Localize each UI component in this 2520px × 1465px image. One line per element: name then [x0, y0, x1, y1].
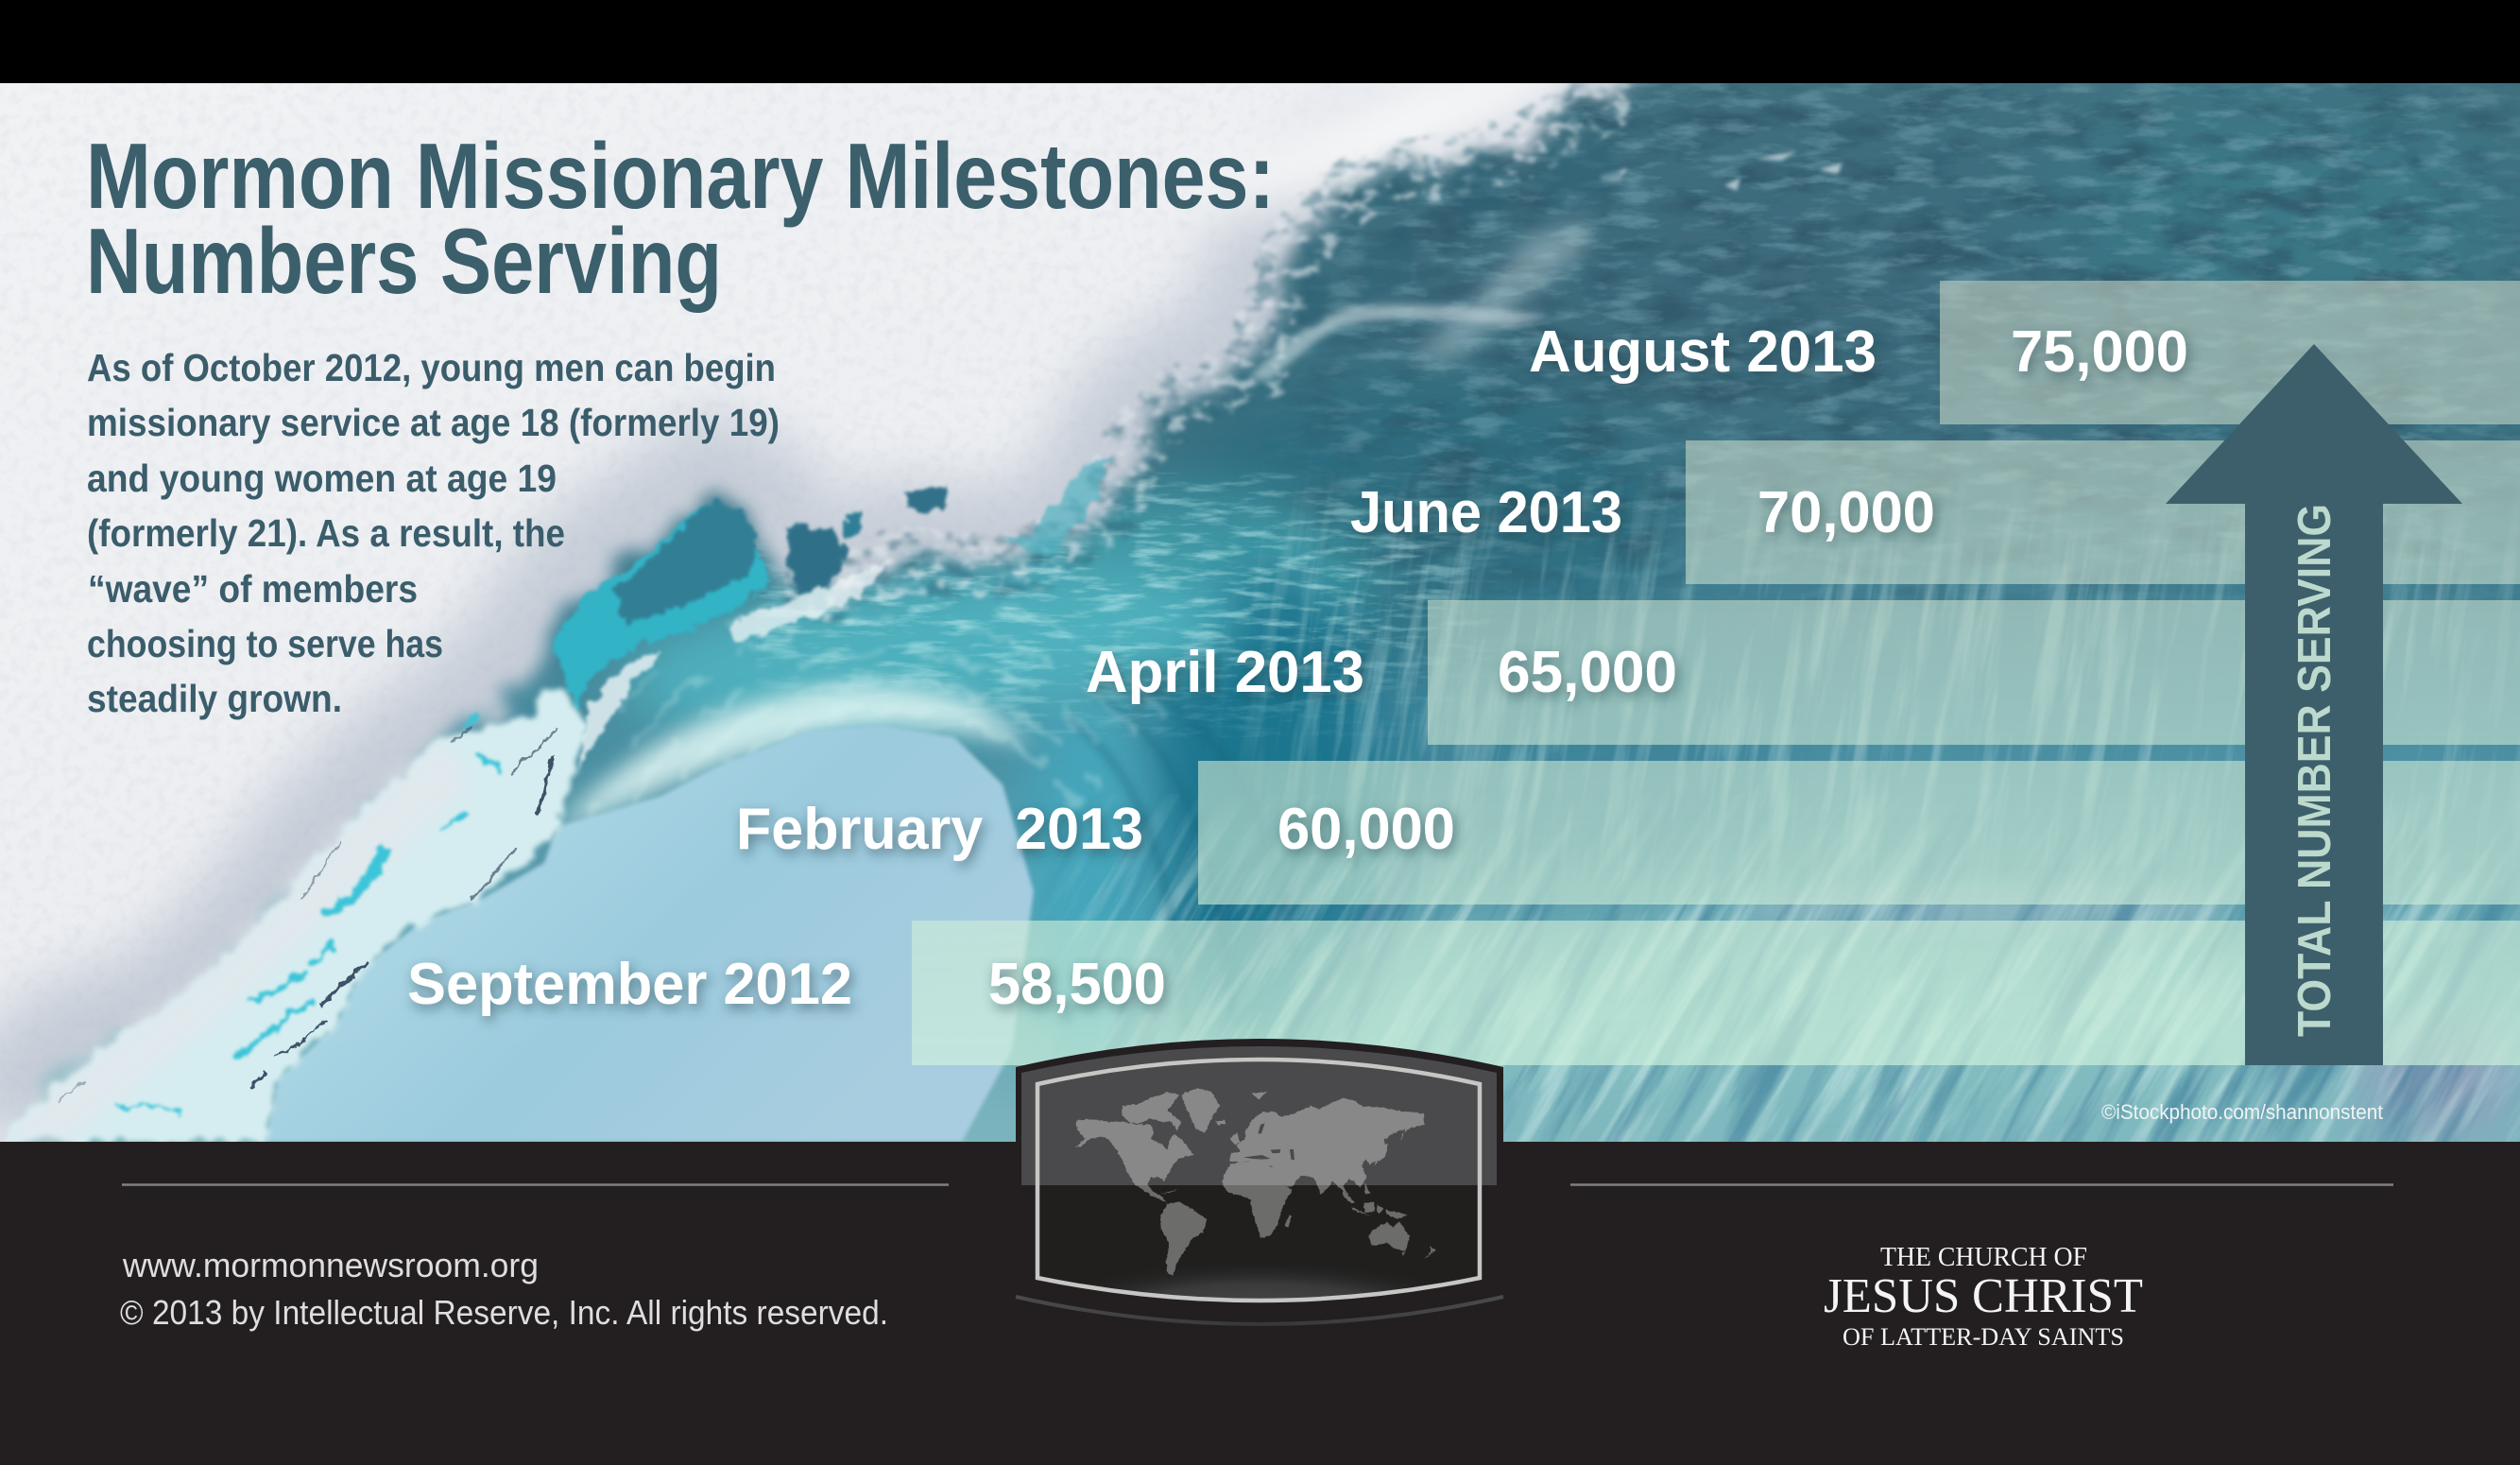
crest highlight	[1249, 304, 1550, 380]
footer band	[0, 1142, 2520, 1465]
photo credit: ©iStockphoto.com/shannonstent	[2101, 1100, 2383, 1124]
intro paragraph: missionary service at age 18 (formerly 19)	[87, 401, 780, 444]
intro paragraph	[87, 346, 780, 720]
bar: June 2013	[1686, 440, 2520, 584]
churned foam band	[0, 686, 586, 1142]
intro paragraph: and young women at age 19	[87, 457, 557, 500]
intro paragraph: steadily grown.	[87, 677, 342, 720]
label: April 2013: April 2013	[1086, 640, 1364, 705]
arrow label: TOTAL NUMBER SERVING	[2289, 504, 2340, 1037]
top black band	[0, 0, 2520, 83]
curl pool	[552, 458, 1110, 709]
lower arc	[1016, 1297, 1503, 1324]
intro paragraph: (formerly 21). As a result, the	[87, 511, 565, 555]
label: June 2013: June 2013	[1350, 480, 1622, 545]
value: 65,000: 65,000	[1498, 640, 1677, 705]
website and copyright: www.mormonnewsroom.org	[122, 1246, 539, 1284]
background photo: ocean wave	[0, 83, 2520, 1142]
title: Numbers Serving	[86, 209, 722, 313]
value: 60,000: 60,000	[1277, 797, 1455, 862]
intro paragraph: “wave” of members	[88, 567, 418, 611]
arrow: total number serving	[2166, 344, 2462, 1065]
map frame	[1037, 1060, 1480, 1301]
title	[86, 124, 1275, 313]
church name	[1824, 1243, 2143, 1351]
spatter along the breaking edge	[784, 83, 1629, 591]
world map	[1074, 1088, 1436, 1275]
streaks right of the tube	[1068, 690, 1294, 1030]
label: September 2012: September 2012	[407, 952, 852, 1017]
dark breaks near wave lip	[1294, 142, 1625, 326]
label: August 2013: August 2013	[1529, 319, 1877, 385]
label: February 2013: February 2013	[736, 797, 1143, 862]
church name: JESUS CHRIST	[1824, 1269, 2143, 1323]
bar: September 2012	[912, 921, 2520, 1065]
bar: February 2013	[1198, 761, 2520, 905]
value: 70,000: 70,000	[1757, 480, 1935, 545]
medallion with world map	[1016, 1039, 1503, 1377]
value: 75,000: 75,000	[2011, 319, 2188, 385]
bar chart: total missionaries by date	[912, 281, 2520, 1065]
date and count labels	[407, 319, 2188, 1017]
bar: April 2013	[1428, 600, 2520, 745]
value: 58,500: 58,500	[988, 952, 1166, 1017]
church name: OF LATTER-DAY SAINTS	[1843, 1323, 2124, 1351]
inner tube of wave	[266, 725, 1034, 1142]
website and copyright: © 2013 by Intellectual Reserve, Inc. All rights reserved.	[120, 1293, 888, 1332]
pale arch above the tube	[557, 685, 1030, 832]
church name: THE CHURCH OF	[1880, 1243, 2087, 1272]
intro paragraph: choosing to serve has	[87, 622, 443, 665]
ripples arching over the tube	[547, 586, 1175, 871]
intro paragraph: As of October 2012, young men can begin	[87, 346, 776, 389]
website and copyright	[120, 1246, 888, 1332]
title: Mormon Missionary Milestones:	[86, 124, 1275, 228]
pale patch on the wave face	[1408, 219, 1587, 359]
white flecks	[1600, 151, 1843, 191]
bar: August 2013	[1940, 281, 2520, 424]
